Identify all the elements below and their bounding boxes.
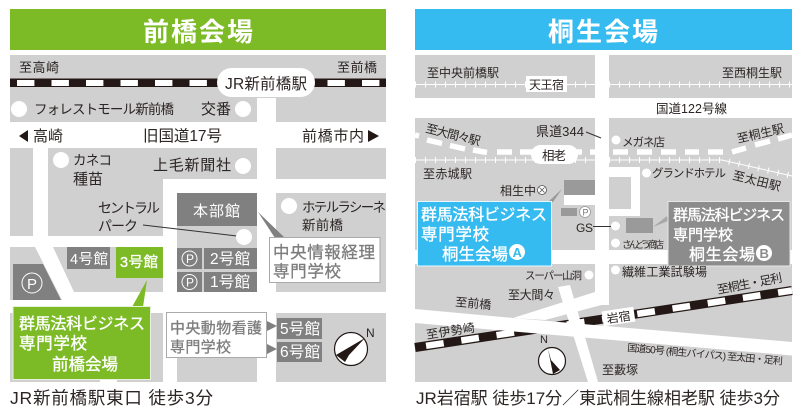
- building: halls 1 and 2 with parking: P: [186, 252, 194, 266]
- icon: north compass: N: [366, 326, 375, 340]
- building: hall 4: [67, 247, 110, 269]
- landmark: Sando shop: [611, 238, 664, 251]
- icon: north compass: [538, 334, 566, 374]
- callout: Gunma law business school Kiryu A: 群馬法科ビジネス: [421, 206, 547, 224]
- callout: Central Park: パーク: [98, 218, 138, 234]
- callout: Gunma law business school Maebashi: [13, 280, 150, 380]
- map labels: south area: 至藪塚: [602, 363, 638, 377]
- building: halls 1 and 2 with parking: P: [186, 276, 194, 290]
- callout: Gunma law business school Maebashi: 専門学校: [19, 334, 87, 353]
- building: hall 5: 5号館: [280, 320, 320, 338]
- landmark: gas station: [576, 221, 620, 235]
- callout: Chuo animal nursing school: 中央動物看護: [170, 320, 262, 337]
- callout: Gunma law business school Kiryu B: 専門学校: [673, 227, 733, 244]
- railway: JR Ryomo line at Iwajuku: [415, 290, 792, 348]
- map labels: north area: 前橋市内: [302, 128, 364, 145]
- map labels: north area: 至西桐生駅: [722, 66, 782, 80]
- building: halls 1 and 2 with parking: [177, 248, 257, 292]
- building: venue A: [564, 180, 595, 195]
- map labels: north area: 県道344: [536, 124, 584, 139]
- panel: Maebashi venue: [10, 9, 386, 408]
- railway: Tobu Kiryu line north: 天王宿: [529, 78, 564, 92]
- callout: Chuo animal nursing school: [166, 312, 277, 358]
- panel: Kiryu venue: [415, 9, 792, 408]
- callout: Central Park: [98, 200, 252, 245]
- building: hall 3: [116, 247, 163, 278]
- map labels: north area: 至桐生駅: [736, 121, 785, 146]
- map labels: north area: ホテルラシーネ: [302, 200, 386, 215]
- map labels: north area: 至中央前橋駅: [427, 65, 499, 80]
- roads: national route 50 and branches: [415, 264, 792, 382]
- building: venue B: [626, 218, 653, 233]
- map labels: north area: 上毛新聞社: [153, 157, 231, 174]
- map labels: north area: グランドホテル: [652, 166, 726, 180]
- building: hall 3: 3号館: [120, 254, 158, 271]
- railway: Tobu line south with Aioi station: 相老: [542, 149, 566, 163]
- callout: Chuo information school: 中央情報経理: [273, 243, 375, 262]
- access note: Maebashi: JR新前橋駅東口 徒歩3分: [10, 388, 214, 408]
- icon: north compass: [334, 326, 375, 366]
- callout: Chuo animal nursing school: 専門学校: [170, 339, 231, 356]
- roads: Kiryu: [564, 55, 640, 382]
- map labels: south area: スーパー山洞: [525, 270, 582, 282]
- map labels: south area: 至大間々: [508, 288, 555, 302]
- railway: Tobu Kiryu line north: [415, 76, 792, 92]
- map labels: south area: 繊維工業試験場: [622, 264, 707, 279]
- building: hall 6: 6号館: [280, 343, 320, 361]
- map labels: south area: 至前橋: [455, 294, 492, 312]
- station label: Iwajuku: [602, 307, 636, 327]
- building: main hall: [177, 193, 257, 226]
- callout: Chuo information school: 専門学校: [273, 262, 341, 281]
- heading: Maebashi venue: [10, 9, 386, 50]
- map labels: south area: 至伊勢崎: [425, 319, 476, 342]
- building: hall 4: 4号館: [70, 251, 108, 268]
- map labels: south area: [425, 264, 783, 377]
- callout: Gunma law business school Kiryu A: [418, 189, 562, 266]
- parking: near venue A: P: [582, 208, 589, 218]
- station label: Iwajuku: 岩宿: [606, 308, 632, 326]
- callout: Gunma law business school Kiryu B: B: [760, 246, 769, 261]
- map labels: north area: 種苗: [73, 171, 103, 188]
- heading: Maebashi venue: 前橋会場: [143, 17, 253, 47]
- station label: JR Shin-Maebashi: [217, 68, 315, 97]
- railway: JR Ryomo line: [10, 78, 386, 87]
- map labels: south area: 至桐生・足利: [716, 271, 783, 297]
- parking: near venue A: [561, 206, 590, 218]
- map blocks: Maebashi: [10, 55, 386, 382]
- callout: Gunma law business school Kiryu B: [653, 202, 790, 266]
- map labels: north area: 旧国道17号: [143, 127, 222, 145]
- landmark: Aioi junior high school: 相生中: [500, 183, 536, 198]
- callout: Gunma law business school Kiryu A: A: [512, 245, 522, 260]
- heading: Kiryu venue: [415, 9, 792, 50]
- building: halls 1 and 2 with parking: 1号館: [210, 273, 250, 291]
- building: halls 1 and 2 with parking: 2号館: [210, 250, 250, 268]
- map labels: north area: 至赤城駅: [423, 167, 472, 181]
- map labels: north area: 新前橋: [302, 217, 344, 233]
- callout: Chuo information school: [258, 212, 380, 282]
- map labels: north area: 至前橋: [337, 60, 377, 75]
- map labels: north area: 交番: [201, 101, 231, 118]
- landmark: Sando shop: さんどう商店: [622, 239, 664, 251]
- map labels: north area: [423, 65, 785, 194]
- map labels: north area: 至大間々駅: [424, 121, 482, 148]
- building: main hall: 本部館: [193, 203, 240, 220]
- station label: JR Shin-Maebashi: JR新前橋駅: [225, 75, 307, 93]
- parking: west lot: [13, 264, 61, 300]
- map labels: north area: カネコ: [73, 153, 112, 168]
- map blocks: Kiryu: [415, 55, 792, 382]
- callout: Gunma law business school Kiryu A: 桐生会場: [442, 245, 508, 264]
- railway: Tobu line south with Aioi station: [415, 135, 792, 176]
- access note: Kiryu: JR岩宿駅 徒歩17分／東武桐生線相老駅 徒歩3分: [416, 389, 780, 408]
- callout: Gunma law business school Maebashi: 群馬法科ビジネス: [19, 315, 145, 333]
- callout: Gunma law business school Kiryu B: 桐生会場: [689, 246, 755, 264]
- gray cover for southern vertical road: [595, 305, 609, 382]
- callout: Gunma law business school Kiryu A: 専門学校: [421, 225, 489, 244]
- map labels: north area: フォレストモール新前橋: [34, 101, 174, 117]
- map labels: north area: 国道122号線: [656, 101, 727, 116]
- callout: Central Park: セントラル: [98, 200, 160, 216]
- heading: Kiryu venue: 桐生会場: [548, 17, 658, 47]
- parking: west lot: P: [27, 276, 37, 293]
- map labels: north area: [11, 60, 386, 233]
- map labels: north area: メガネ店: [622, 136, 665, 149]
- map labels: north area: 高崎: [33, 128, 63, 145]
- map labels: south area: 国道50号 (桐生バイパス) 至太田・足利: [627, 341, 783, 368]
- icon: north compass: N: [540, 334, 548, 346]
- callout: Gunma law business school Kiryu B: 群馬法科ビジネス: [673, 207, 785, 224]
- map labels: north area: 至高崎: [19, 60, 59, 75]
- map labels: north area: 至太田駅: [731, 167, 782, 194]
- landmark: gas station: GS: [576, 221, 593, 235]
- callout: Gunma law business school Maebashi: 前橋会場: [52, 355, 118, 374]
